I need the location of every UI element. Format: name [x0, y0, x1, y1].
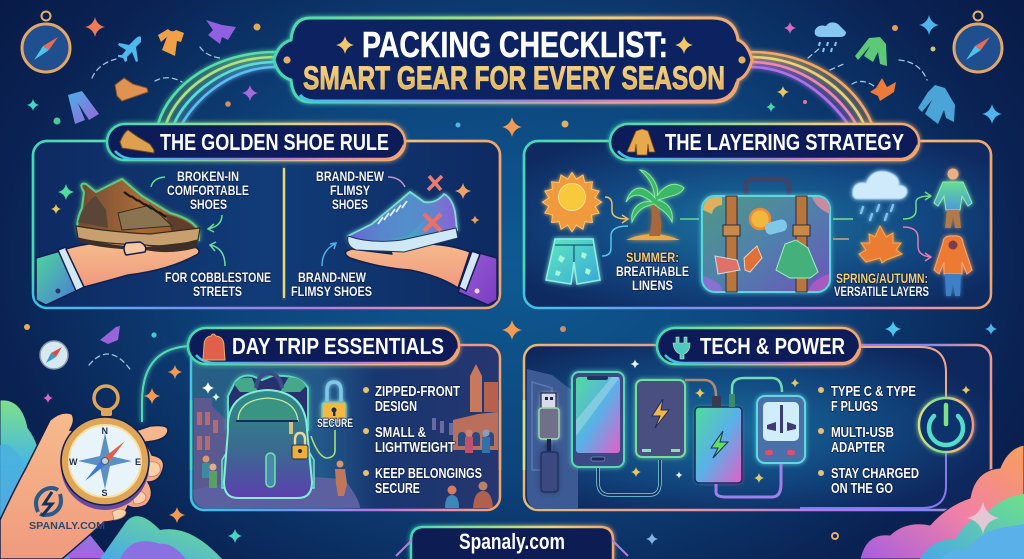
- text: footer url: Spanaly.com: [459, 529, 565, 554]
- icon: suitcase: [702, 179, 830, 292]
- bullets: day trip list: [363, 383, 482, 497]
- icon: kite on dashed path: [89, 326, 132, 372]
- icon: plug: [673, 337, 690, 359]
- icon: boot: [115, 78, 148, 101]
- icon: spanaly logo: [36, 488, 61, 516]
- compass letters: E: [135, 457, 141, 467]
- icon: dashed travel paths: [92, 47, 927, 86]
- text: multi-usb adapter: ADAPTER: [831, 439, 885, 456]
- room background: [527, 369, 578, 509]
- inner rail around power button: [860, 347, 946, 398]
- heading: the golden shoe rule: THE GOLDEN SHOE RULE: [160, 129, 389, 155]
- icon: sparkles: [630, 360, 970, 483]
- text: for cobblestone streets: [165, 269, 271, 299]
- text: brand-new flimsy shoes top: BRAND-NEW: [316, 168, 385, 184]
- icon: red x: [428, 176, 442, 190]
- icon: usb cable: [539, 393, 559, 492]
- street scene left: [193, 398, 360, 508]
- text: brand-new flimsy shoes top: SHOES: [332, 196, 368, 212]
- title line 2: SMART GEAR FOR EVERY SEASON: [303, 60, 725, 96]
- text: type c and type f plugs: F PLUGS: [831, 398, 878, 415]
- icon: phone: [572, 372, 624, 467]
- icon: sneaker with x: [348, 192, 458, 252]
- title banner: [274, 18, 752, 102]
- icon: compass top left: [22, 12, 70, 72]
- panel: the golden shoe rule: [33, 124, 500, 308]
- text: small and lightweight: LIGHTWEIGHT: [375, 439, 455, 456]
- text: broken-in comfortable shoes: BROKEN-IN: [177, 168, 239, 184]
- text: stay charged on the go: [831, 465, 919, 497]
- bullets: tech list: [818, 383, 919, 497]
- icon: blue jacket: [918, 85, 955, 124]
- text: stay charged on the go: ON THE GO: [831, 480, 893, 497]
- text: broken-in comfortable shoes: SHOES: [190, 196, 227, 212]
- compass body: [61, 386, 149, 510]
- text: spring autumn versatile layers: [834, 270, 929, 299]
- icon: maple leaf: [859, 226, 902, 263]
- text: brand-new flimsy shoes bottom: BRAND-NEW: [298, 269, 367, 285]
- text: small and lightweight: SMALL &: [375, 424, 426, 441]
- compass letters: N: [102, 426, 108, 436]
- text: broken-in comfortable shoes: [167, 168, 249, 212]
- text: multi-usb adapter: MULTI-USB: [831, 424, 894, 441]
- panel: tech and power: [524, 328, 991, 510]
- text: brand-new flimsy shoes bottom: [291, 269, 372, 299]
- street scene right: [432, 364, 498, 508]
- icon: left hand holding shoe: [36, 242, 199, 305]
- icon: green jacket: [855, 37, 887, 66]
- icon: arrows to palm: [602, 192, 931, 261]
- icon: connector arc to day trip panel: [142, 346, 190, 422]
- icon: cables: [598, 378, 782, 497]
- text: type c and type f plugs: TYPE C & TYPE: [831, 383, 916, 400]
- text: zipped-front design: ZIPPED-FRONT: [375, 383, 460, 400]
- icon: hand holding compass: [0, 386, 168, 559]
- text: summer breathable linens: SUMMER:: [626, 249, 679, 265]
- icon: small compass: [40, 341, 68, 369]
- icon: orange person: [934, 236, 972, 296]
- text: spring autumn versatile layers: SPRING/AUTUMN:: [836, 270, 928, 286]
- icon: travel adapter: [757, 396, 805, 463]
- text: small and lightweight: [375, 424, 455, 456]
- heading: day trip essentials: [188, 328, 459, 364]
- icon: arrows right: [322, 177, 405, 266]
- heading: the layering strategy: [610, 124, 919, 160]
- icon: large padlock: [322, 382, 346, 422]
- text: spanaly.com logo: SPANALY.COM: [29, 521, 105, 532]
- panel: day trip essentials: [188, 328, 500, 510]
- icon: right hand holding sneaker: [345, 242, 497, 305]
- text: stay charged on the go: STAY CHARGED: [831, 465, 919, 482]
- compass letters: [69, 426, 141, 498]
- title line 1: PACKING CHECKLIST:: [362, 24, 668, 65]
- icon: sparkles: [202, 382, 220, 401]
- icon: shoe: [120, 130, 154, 153]
- cloud bottom right: [860, 445, 1024, 559]
- rainbow arc right: [750, 52, 872, 124]
- icon: shorts: [546, 239, 600, 284]
- text: keep belongings secure: [375, 465, 482, 497]
- icon: rain cloud: [853, 171, 907, 220]
- icon: sun: [542, 172, 602, 232]
- icon: plane: [118, 36, 141, 62]
- text: keep belongings secure: SECURE: [375, 480, 420, 497]
- icon: small padlock: [292, 433, 308, 459]
- text: brand-new flimsy shoes bottom: FLIMSY SHOES: [291, 283, 372, 299]
- text: type c and type f plugs: [831, 383, 916, 415]
- footer badge: [396, 527, 628, 559]
- text: multi-usb adapter: [831, 424, 894, 456]
- icon: palm tree: [626, 170, 684, 240]
- icon: jacket: [627, 129, 655, 155]
- text: secure: SECURE: [317, 418, 353, 430]
- heading: the golden shoe rule: [107, 124, 405, 160]
- icon: sparkles right: [455, 183, 480, 224]
- text: for cobblestone streets: FOR COBBLESTONE: [165, 269, 271, 285]
- heading: day trip essentials: DAY TRIP ESSENTIALS: [232, 333, 444, 359]
- icon: colourful power bank: [695, 407, 742, 483]
- icon: brown walking shoe: [76, 179, 200, 252]
- icon: orange t-shirt: [158, 29, 184, 56]
- heading: tech and power: [657, 328, 860, 364]
- text: broken-in comfortable shoes: COMFORTABLE: [167, 182, 249, 198]
- compass letters: W: [69, 457, 78, 467]
- icon: compass top right: [954, 12, 1002, 72]
- icon: backpack: [222, 373, 314, 498]
- icon: dark power bank: [636, 380, 685, 457]
- icon: green person: [934, 168, 972, 228]
- text: spring autumn versatile layers: VERSATILE LAYERS: [834, 283, 929, 299]
- text: for cobblestone streets: STREETS: [193, 283, 242, 299]
- text: keep belongings secure: KEEP BELONGINGS: [375, 465, 482, 482]
- icon: rain cloud: [815, 22, 846, 52]
- icon: autumn leaf: [870, 78, 896, 101]
- divider: [283, 168, 285, 298]
- icon: mini backpack: [203, 334, 225, 360]
- icon: pants: [68, 91, 99, 124]
- icon: power button: [919, 398, 973, 452]
- connector to lock: [311, 430, 335, 458]
- text: zipped-front design: DESIGN: [375, 398, 417, 415]
- text: brand-new flimsy shoes top: FLIMSY: [330, 182, 371, 198]
- heading: the layering strategy: THE LAYERING STRATEGY: [665, 129, 904, 155]
- text: zipped-front design: [375, 383, 460, 415]
- icon: sparkles left: [51, 184, 74, 214]
- text: summer breathable linens: [616, 249, 689, 293]
- compass letters: S: [102, 488, 108, 498]
- text: summer breathable linens: BREATHABLE: [616, 263, 689, 279]
- panel: the layering strategy: [524, 124, 991, 308]
- rainbow arc left: [158, 52, 276, 124]
- icon: purple shirt: [206, 20, 236, 44]
- icon: thumb: [124, 242, 146, 255]
- cloud bottom left: [0, 400, 222, 559]
- text: summer breathable linens: LINENS: [632, 277, 673, 293]
- icon: arrows left: [151, 177, 225, 266]
- text: brand-new flimsy shoes top: [316, 168, 385, 212]
- heading: tech and power: TECH & POWER: [700, 333, 845, 359]
